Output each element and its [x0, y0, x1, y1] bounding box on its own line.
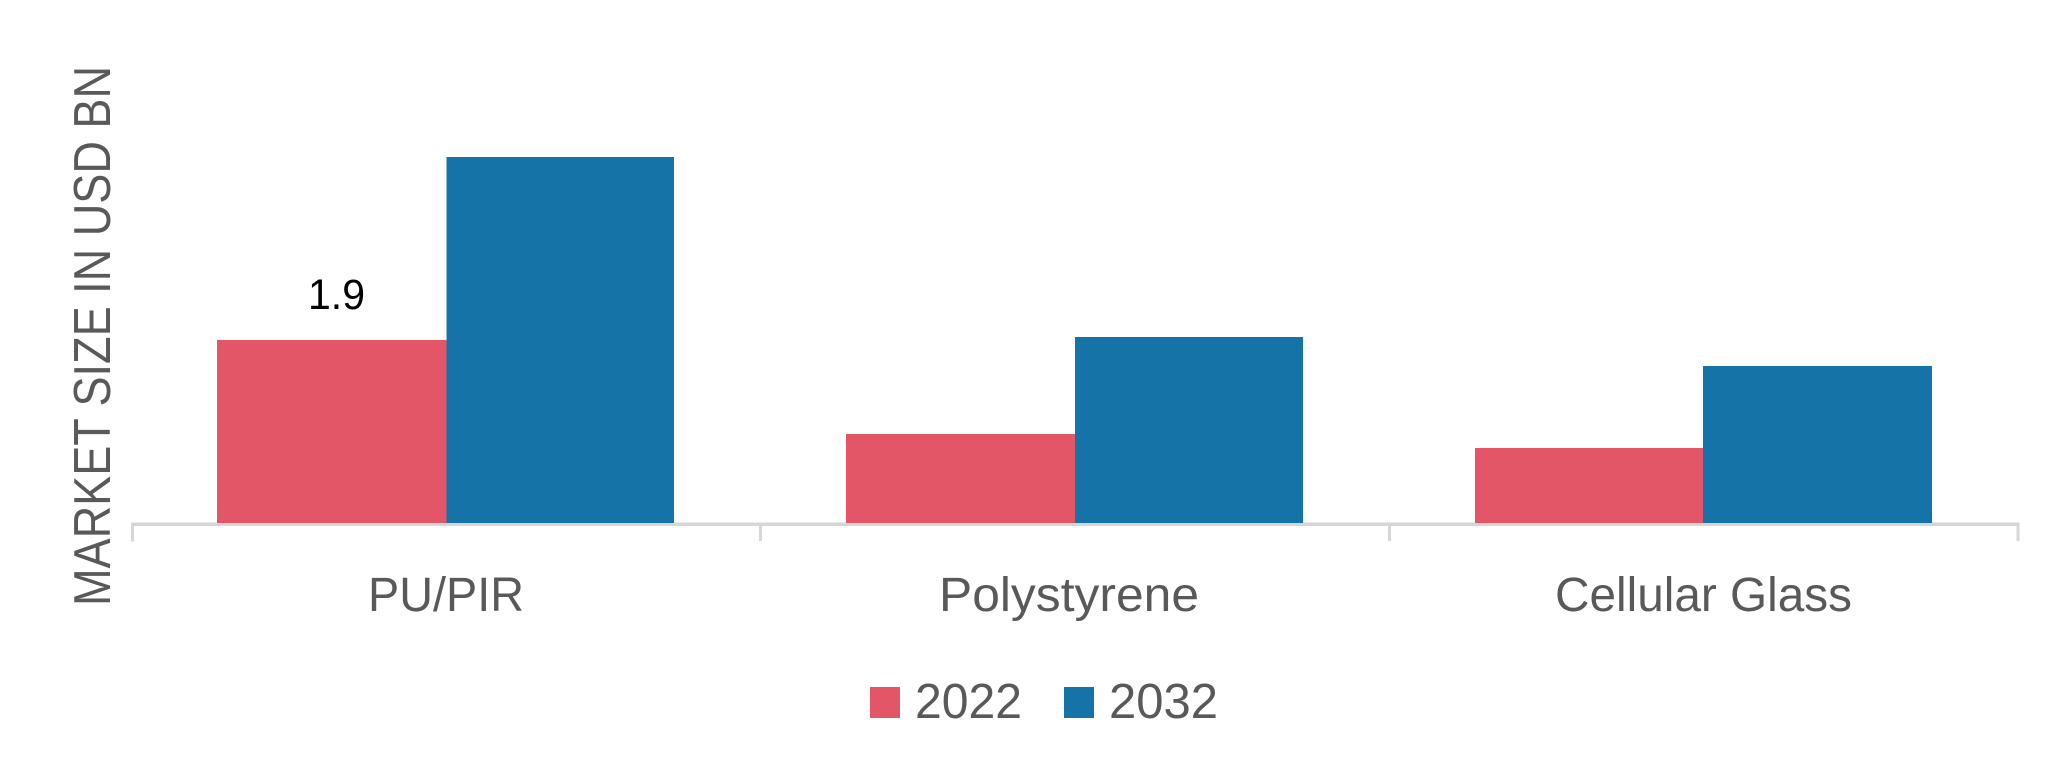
category label: Cellular Glass: Cellular Glass [1555, 569, 1852, 622]
data label: 1.9: 1.9 [308, 271, 365, 319]
legend label: 2022: 2022 [915, 675, 1022, 729]
x axis line and ticks [131, 522, 2020, 542]
category label: Polystyrene: Polystyrene [939, 569, 1199, 622]
legend swatch: 2022 [870, 687, 900, 718]
bar: Polystyrene 2032 [1075, 337, 1303, 523]
y-axis title: MARKET SIZE IN USD BN [64, 66, 122, 606]
bar group: Polystyrene [846, 337, 1303, 523]
legend label: 2032: 2032 [1109, 675, 1218, 729]
bar group: Cellular Glass [1475, 366, 1932, 523]
bar: PU/PIR 2022 [217, 340, 446, 523]
category label: PU/PIR: PU/PIR [368, 569, 524, 622]
bar: Cellular Glass 2032 [1703, 366, 1932, 523]
legend swatch: 2032 [1064, 687, 1094, 718]
bar: Polystyrene 2022 [846, 434, 1075, 523]
bar group: PU/PIR [217, 157, 674, 523]
legend [870, 675, 1218, 729]
bar: Cellular Glass 2022 [1475, 448, 1703, 523]
bar: PU/PIR 2032 [446, 157, 674, 523]
